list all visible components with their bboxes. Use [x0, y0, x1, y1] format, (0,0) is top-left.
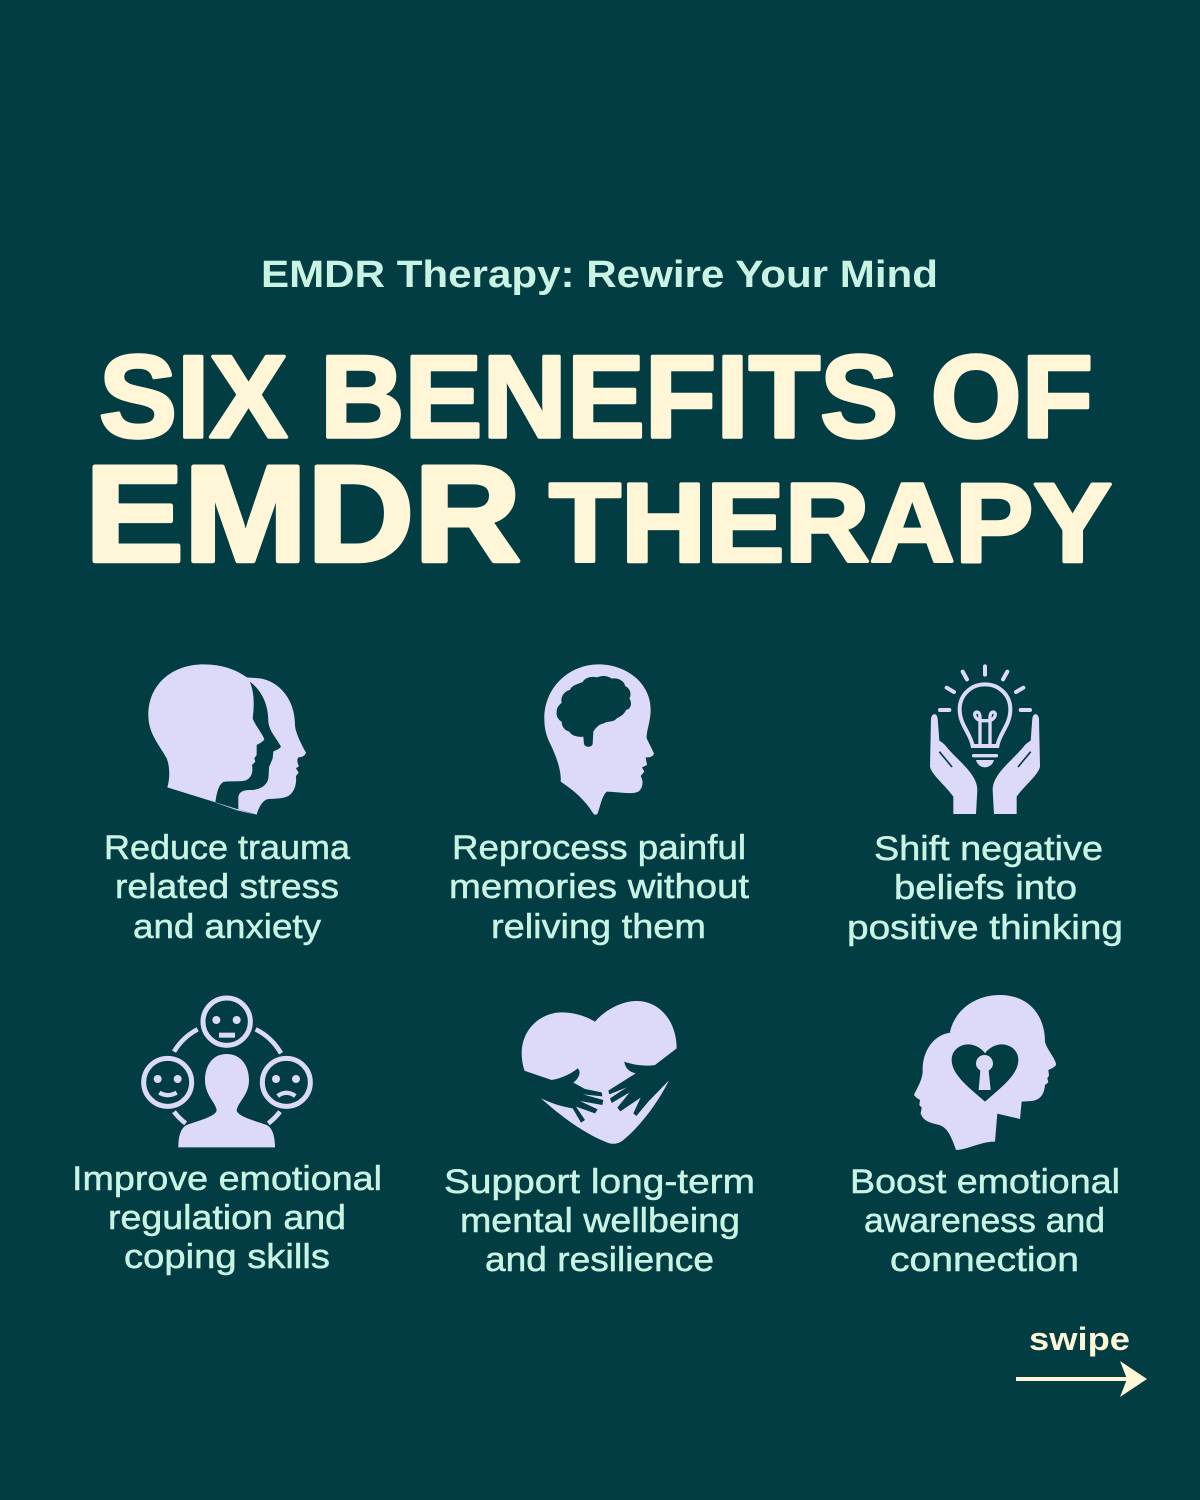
caption: reduce trauma: and anxiety [133, 908, 321, 946]
swipe label: swipe [1029, 1321, 1130, 1357]
right hand [993, 714, 1040, 814]
caption: support long-term wellbeing: and resilience [485, 1241, 714, 1279]
left hand [930, 714, 977, 814]
caption: shift negative beliefs: positive thinking [847, 909, 1123, 947]
sad face [262, 1058, 310, 1106]
caption: support long-term wellbeing: mental wellbeing [460, 1202, 740, 1240]
front head [914, 1033, 997, 1150]
caption: shift negative beliefs [847, 830, 1123, 947]
heart [522, 1001, 677, 1144]
caption: improve emotional regulation: regulation and [108, 1199, 346, 1237]
finger gaps [939, 752, 1031, 767]
title line 1: SIX BENEFITS OF [99, 331, 1093, 462]
caption: support long-term wellbeing: Support long-term [444, 1163, 755, 1201]
happy face [144, 1058, 192, 1106]
icon: light bulb held by hands [930, 666, 1040, 814]
caption: shift negative beliefs: Shift negative [874, 830, 1103, 868]
icon: overlapping head profiles [148, 664, 306, 815]
caption: reduce trauma: Reduce trauma [104, 829, 350, 867]
title word: THERAPY: THERAPY [549, 460, 1112, 586]
caption: support long-term wellbeing [444, 1163, 755, 1279]
subtitle: EMDR Therapy: Rewire Your Mind [261, 254, 938, 296]
caption: boost emotional awareness [850, 1163, 1120, 1279]
right hand [608, 1048, 695, 1116]
caption: reprocess memories: memories without [449, 868, 750, 906]
caption: boost emotional awareness: connection [890, 1241, 1079, 1279]
caption: shift negative beliefs: beliefs into [894, 869, 1077, 907]
title [85, 331, 1112, 591]
caption: reprocess memories: Reprocess painful [452, 829, 746, 867]
caption: reprocess memories [449, 829, 750, 946]
benefit 1 [104, 664, 350, 946]
bulb base [972, 754, 998, 767]
left hand [505, 1067, 603, 1123]
keyhole [976, 1055, 993, 1090]
benefit 6 [850, 995, 1120, 1279]
neutral face [203, 998, 250, 1045]
caption: improve emotional regulation: coping skills [124, 1238, 330, 1276]
caption: reduce trauma [104, 829, 350, 946]
benefit 2 [449, 664, 750, 946]
icon: two heads with heart keyhole [914, 995, 1056, 1150]
ring arcs [174, 1029, 281, 1123]
arrow [1016, 1361, 1147, 1397]
bulb outline [960, 684, 1010, 746]
icon: heart embraced by hands [505, 1001, 695, 1144]
caption: boost emotional awareness: Boost emotional [850, 1163, 1120, 1201]
caption: reprocess memories: reliving them [491, 908, 706, 946]
light rays [940, 666, 1030, 710]
title word: EMDR: EMDR [85, 438, 521, 591]
caption: improve emotional regulation [72, 1160, 382, 1276]
back head [950, 995, 1056, 1119]
icon: head with brain [544, 664, 654, 815]
heart keyhole [952, 1044, 1018, 1102]
person silhouette [178, 1054, 275, 1147]
caption: reduce trauma: related stress [115, 868, 339, 906]
benefit 4 [72, 998, 382, 1276]
caption: improve emotional regulation: Improve emotional [72, 1160, 382, 1198]
caption: boost emotional awareness: awareness and [864, 1202, 1105, 1240]
benefit 3 [847, 666, 1123, 947]
icon: person with mood faces [144, 998, 310, 1147]
benefit 5 [444, 1001, 755, 1279]
